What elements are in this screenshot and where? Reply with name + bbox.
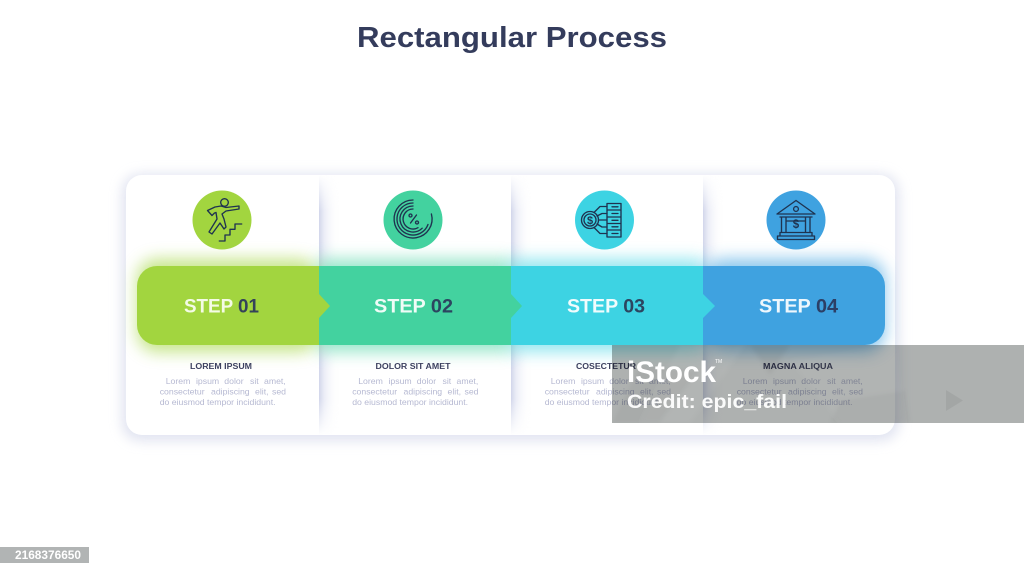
arrow 2 (511, 294, 522, 318)
arrow 3 (703, 294, 715, 318)
text block: step 4: ipsum (773, 376, 796, 386)
text block: step 2: consectetur (352, 386, 397, 396)
text block: step 1: LOREM IPSUM (190, 361, 252, 371)
text block: step 4: adipiscing (788, 386, 827, 396)
text block: step 3: sed (657, 386, 671, 396)
text block: step 4: dolor (801, 376, 821, 386)
text block: step 4: elit, (832, 386, 846, 396)
text block: step 4: sed (849, 386, 863, 396)
text block: step 1 (160, 361, 286, 407)
text block: step 1: adipiscing (211, 386, 250, 396)
watermark texture (758, 348, 962, 410)
text block: step 4: consectetur (737, 386, 782, 396)
text block: step 4: sit (827, 376, 836, 386)
text block: step 4 (737, 361, 863, 407)
watermark trademark: TM (715, 359, 722, 365)
text block: step 2: elit, (448, 386, 461, 396)
text block: step 3: consectetur (545, 386, 590, 396)
icon: money to server rack: $ (587, 215, 593, 227)
text block: step 1: sed (272, 386, 286, 396)
text block: step 3: ipsum (581, 376, 604, 386)
text block: step 2: DOLOR SIT AMET (376, 361, 451, 371)
step 04 label: STEP 04 (759, 296, 838, 318)
text block: step 2: sit (442, 376, 452, 386)
step 03 bar (511, 266, 703, 345)
image id tag: 2168376650 (15, 550, 81, 562)
text block: step 4: Lorem (743, 376, 767, 386)
panel: white card (122, 174, 899, 441)
text block: step 1: do eiusmod tempor incididunt. (160, 397, 276, 407)
icon: percent radar (384, 190, 442, 250)
text block: step 3: sit (635, 376, 644, 386)
icon: bank (766, 190, 826, 250)
text block: step 4: MAGNA ALIQUA (763, 361, 833, 371)
text block: step 1: dolor (224, 376, 244, 386)
watermark logo: iStock (627, 356, 716, 389)
text block: step 2: ipsum (388, 376, 412, 386)
text block: step 2: amet, (456, 376, 478, 386)
text block: step 1: Lorem (166, 376, 190, 386)
text block: step 4: do eiusmod tempor incididunt. (737, 397, 853, 407)
text block: step 3: dolor (609, 376, 629, 386)
text block: step 3: amet, (649, 376, 671, 386)
text block: step 2: adipiscing (404, 386, 442, 396)
text block: step 1: ipsum (196, 376, 219, 386)
watermark credit: Credit: epic_fail (627, 391, 787, 413)
text block: step 3: do eiusmod tempor incididunt. (545, 397, 661, 407)
text block: step 2: do eiusmod tempor incididunt. (352, 397, 468, 407)
step 04 bar (703, 266, 885, 345)
icon: money to server rack (575, 190, 634, 250)
step 02 label: STEP 02 (374, 296, 453, 318)
step 03 label: STEP 03 (567, 296, 645, 318)
title: Rectangular Process (357, 22, 667, 54)
icon: bank: $ (793, 219, 800, 231)
watermark band (612, 345, 1024, 423)
text block: step 2 (352, 361, 479, 407)
column shadows (319, 175, 723, 435)
text block: step 1: sit (250, 376, 259, 386)
text block: step 2: dolor (417, 376, 436, 386)
text block: step 1: amet, (264, 376, 286, 386)
text block: step 4: amet, (841, 376, 863, 386)
step 01 label: STEP 01 (184, 296, 259, 318)
text block: step 2: sed (464, 386, 479, 396)
text block: step 3: Lorem (551, 376, 575, 386)
image id tag (0, 547, 89, 563)
text block: step 1: elit, (255, 386, 269, 396)
step 01 bar (137, 266, 319, 345)
text block: step 2: Lorem (358, 376, 383, 386)
text block: step 3: adipiscing (596, 386, 635, 396)
step 02 bar (319, 266, 511, 345)
text block: step 1: consectetur (160, 386, 205, 396)
text block: step 3: elit, (640, 386, 654, 396)
text block: step 3 (545, 361, 671, 407)
icon: running down stairs (192, 190, 252, 250)
text block: step 3: COSECTETUR (576, 361, 637, 371)
arrow 1 (319, 294, 330, 318)
bar glow (137, 259, 885, 352)
